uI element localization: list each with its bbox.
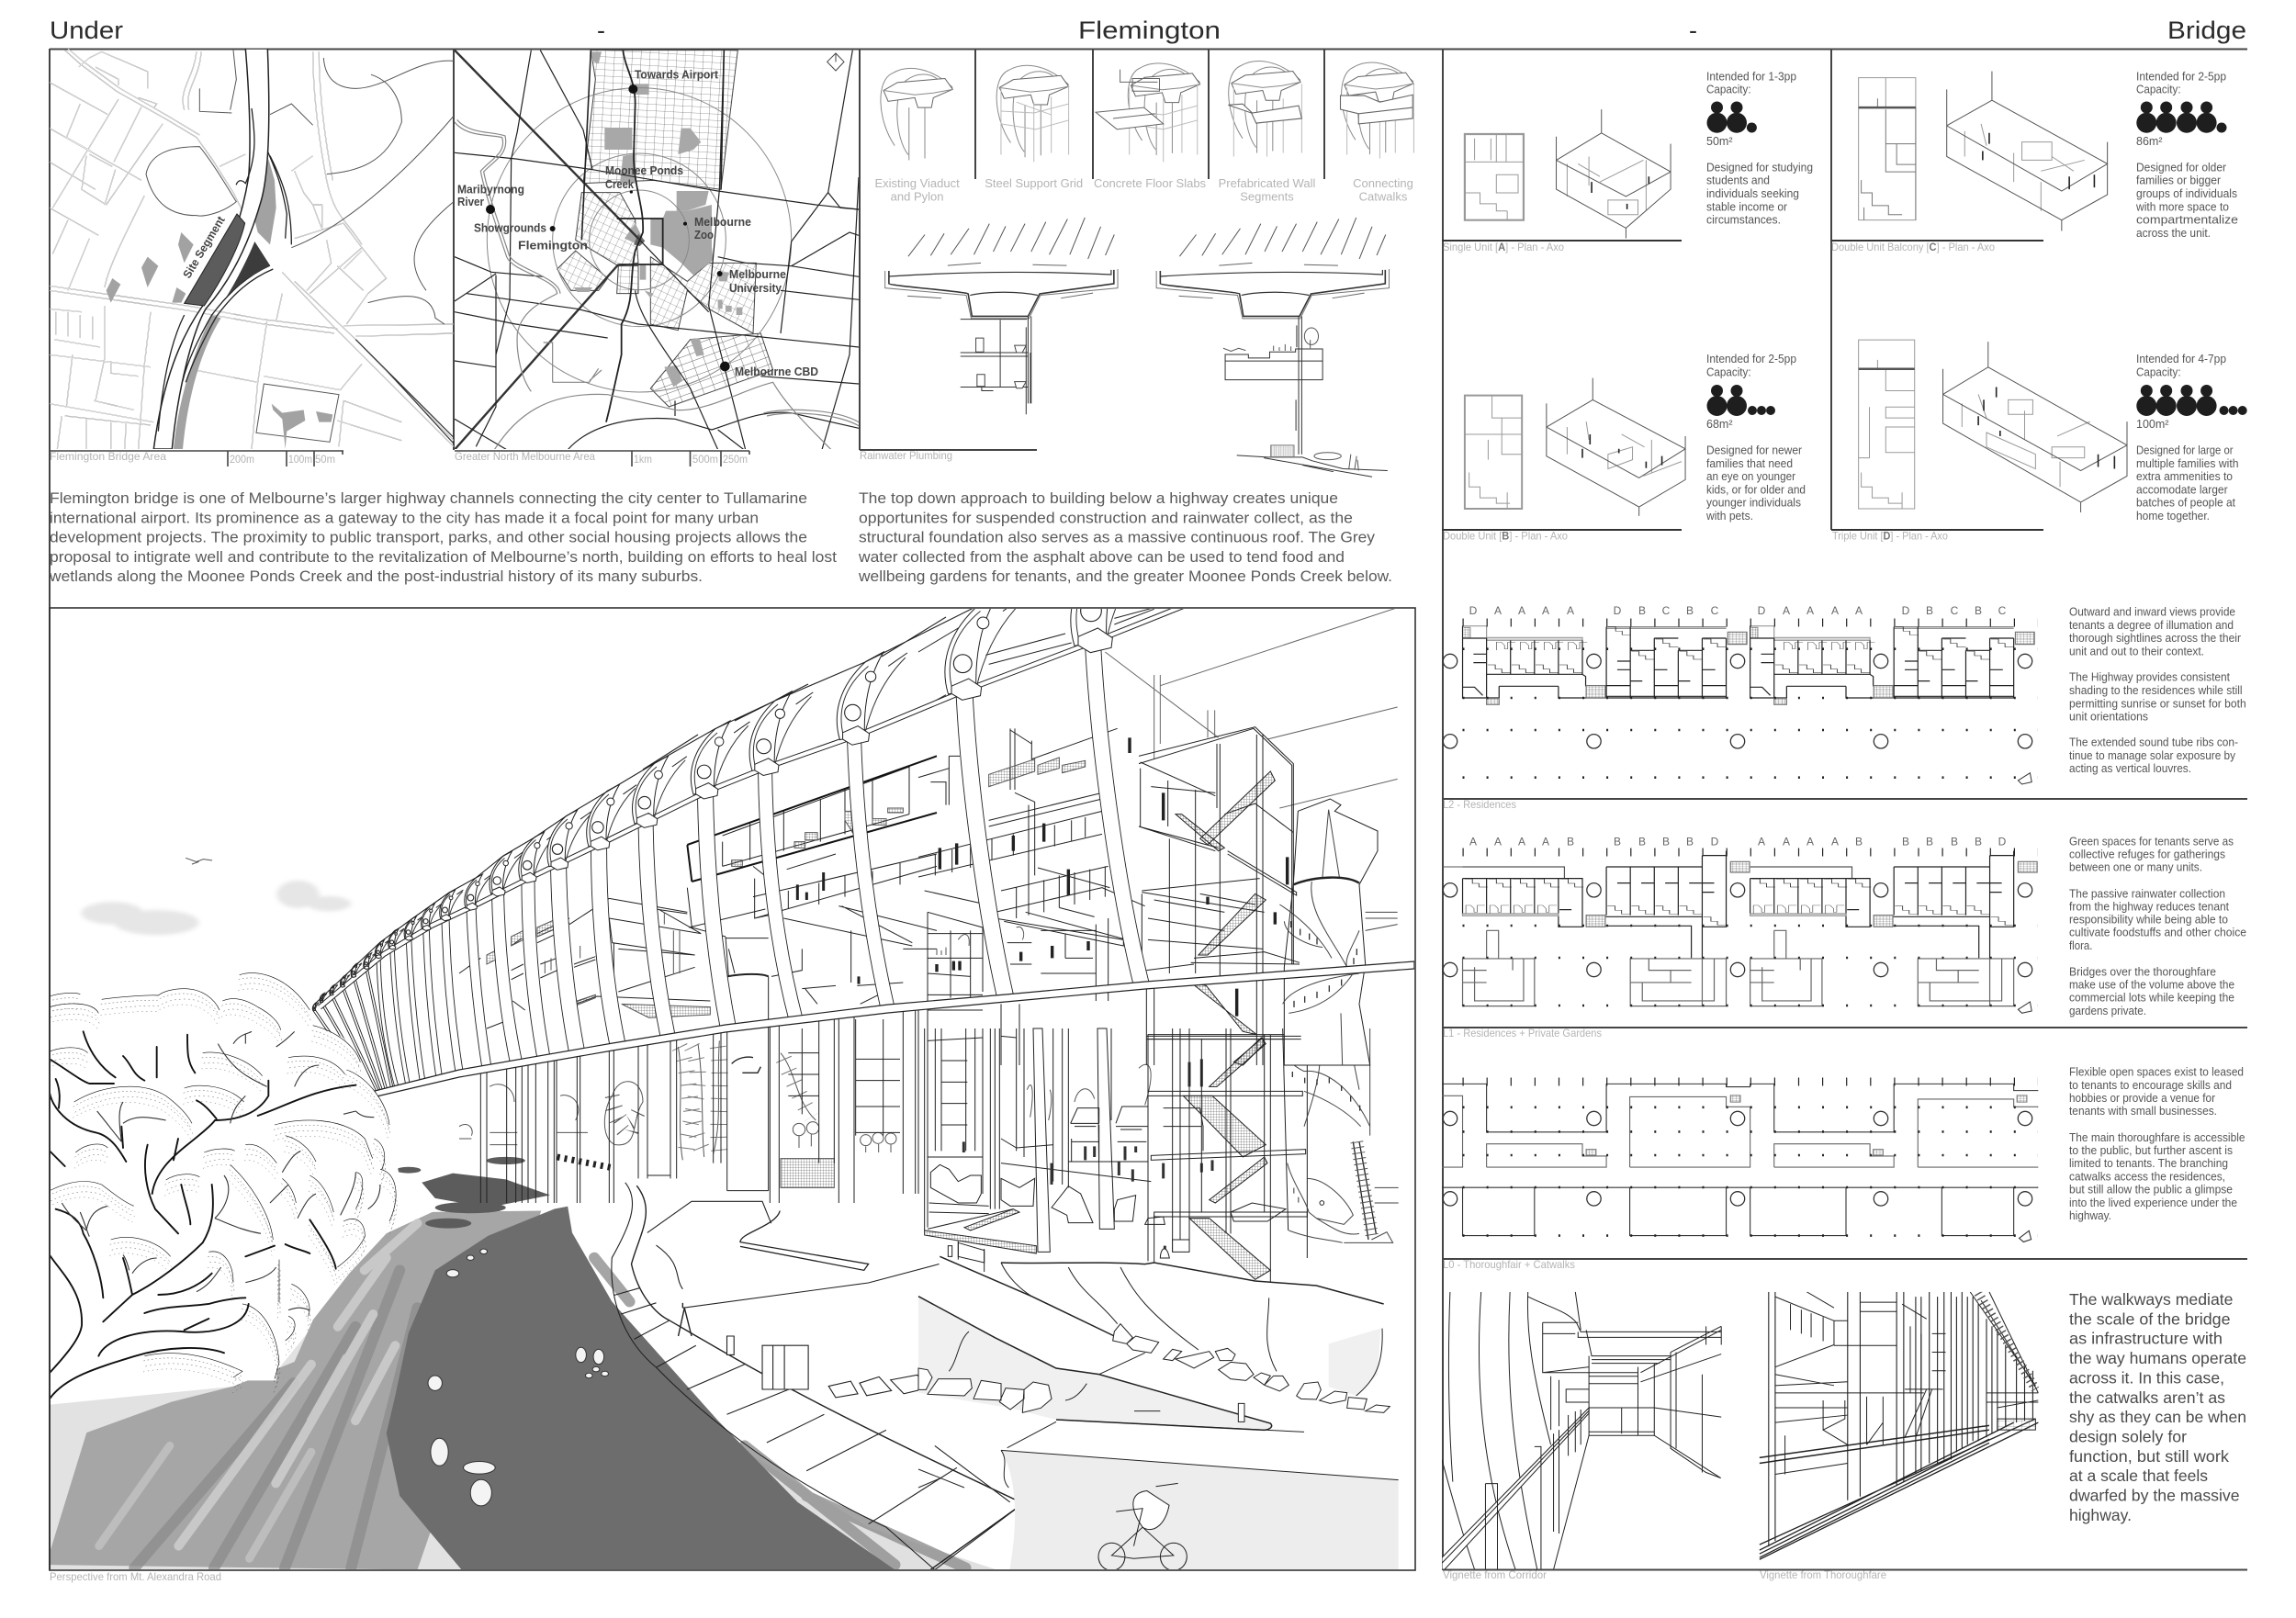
map 2 caption and scale: 1km xyxy=(634,453,652,466)
perspective frame xyxy=(50,608,1415,1570)
text block: walkways: highway. xyxy=(2069,1506,2132,1524)
panel: L0 thoroughfare and catwalks plan xyxy=(1442,1065,2247,1271)
unit C specification: Designed for older xyxy=(2136,161,2226,174)
unit B specification: 68m² xyxy=(1706,418,1732,431)
wetland pools xyxy=(396,1157,550,1229)
L1 description: collective refuges for gatherings xyxy=(2069,848,2225,861)
L1 column grid xyxy=(1462,852,2038,1006)
unit B specification: families that need xyxy=(1706,457,1793,470)
text block: top down approach: The top down approach to building below a highway creates unique xyxy=(859,490,1338,507)
text block: site description: international airport. Its prominence as a gateway to the city has made it a focal point for many urban xyxy=(50,510,759,526)
unit C specification: families or bigger xyxy=(2136,174,2221,187)
panel: greater north Melbourne map xyxy=(455,51,859,466)
map 2 caption and scale: 500m xyxy=(692,453,718,466)
unit C specification: with more space to xyxy=(2135,200,2229,213)
unit D specification: home together. xyxy=(2136,510,2210,522)
unit D specification: extra ammenities to xyxy=(2136,470,2233,483)
L2 unit letters: C xyxy=(1998,604,2007,617)
map 2 caption and scale: Greater North Melbourne Area xyxy=(455,450,595,463)
unit C specification xyxy=(2135,70,2238,240)
text block: walkways: at a scale that feels xyxy=(2069,1466,2208,1485)
lower rooms xyxy=(928,912,1109,1065)
L1 unit letters: A xyxy=(1806,836,1814,848)
L2 unit letters: C xyxy=(1662,604,1671,617)
L2 description: acting as vertical louvres. xyxy=(2069,762,2191,775)
map 2 labels: River xyxy=(457,196,484,208)
market stalls xyxy=(1068,1107,1203,1163)
title bar: - xyxy=(597,17,605,44)
brush strokes beside creek xyxy=(99,1223,966,1567)
unit A specification: students and xyxy=(1706,174,1770,187)
boardwalk xyxy=(925,1209,1036,1253)
stair tower lower xyxy=(1148,1035,1307,1217)
creek water xyxy=(387,1207,895,1570)
step: steel support grid xyxy=(996,65,1069,162)
L2 plan linework xyxy=(1463,626,2034,784)
step captions xyxy=(874,176,1413,204)
tower frame xyxy=(1139,727,1301,1065)
riverside path and banks xyxy=(612,1183,1023,1570)
roof beam linking ribs xyxy=(320,585,1236,1007)
ribs dark outlines xyxy=(314,514,1286,1095)
rock tower xyxy=(1284,799,1378,1065)
unit A specification: individuals seeking xyxy=(1706,187,1799,200)
unit C specification: across the unit. xyxy=(2136,227,2211,240)
L1 description: gardens private. xyxy=(2069,1005,2146,1017)
L1 unit letters: B xyxy=(1951,836,1958,848)
L2 unit letters: D xyxy=(1614,604,1622,617)
unit D specification: 100m² xyxy=(2136,418,2168,431)
L1 description: from the highway reduces tenant xyxy=(2069,900,2230,913)
map 1 gray buildings xyxy=(107,159,332,449)
L0 description xyxy=(2069,1065,2245,1222)
title bar: Flemington xyxy=(1078,17,1221,44)
L2 description: unit and out to their context. xyxy=(2069,645,2204,657)
unit D specification: Designed for large or xyxy=(2136,444,2234,457)
L2 unit letters: D xyxy=(1902,604,1910,617)
step captions: and Pylon xyxy=(891,190,944,204)
birds on the water xyxy=(428,1249,608,1506)
L1 unit letters: D xyxy=(1998,836,2007,848)
step: prefabricated wall segments xyxy=(1228,62,1301,156)
map 2 labels: Moonee Ponds xyxy=(605,164,683,177)
clouds and distant birds xyxy=(82,858,351,935)
L1 unit letters: A xyxy=(1831,836,1839,848)
title bar: Under xyxy=(50,17,123,44)
map 2 gray parks xyxy=(574,51,742,387)
L1 unit letters: B xyxy=(1662,836,1670,848)
vignette from corridor xyxy=(1442,1292,1721,1569)
L2 unit letters: A xyxy=(1494,604,1502,617)
text block: walkways: the way humans operate xyxy=(2069,1349,2246,1367)
text block: walkways xyxy=(2069,1290,2246,1524)
unit C specification: 86m² xyxy=(2136,135,2162,148)
text block: site description: wetlands along the Moonee Ponds Creek and the post-industrial history of its many suburbs. xyxy=(49,568,703,585)
L1 unit letters: A xyxy=(1758,836,1765,848)
L2 unit letters: B xyxy=(1686,604,1694,617)
rainwater section: gardens and creek xyxy=(1156,218,1390,477)
L2 unit letters: A xyxy=(1567,604,1574,617)
map 2 labels: Maribyrnong xyxy=(457,184,524,197)
fine twigs xyxy=(62,1031,380,1310)
L2 description: thorough sightlines across the their xyxy=(2069,632,2241,645)
L1 unit letters: B xyxy=(1855,836,1863,848)
unit C drawings xyxy=(1859,72,2108,231)
L2 column grid xyxy=(1462,623,2038,778)
vignette captions: Vignette from Corridor xyxy=(1443,1568,1547,1581)
L2 unit letters: A xyxy=(1542,604,1549,617)
unit B specification: Designed for newer xyxy=(1706,444,1802,457)
step captions: Concrete Floor Slabs xyxy=(1094,176,1207,190)
L0 description: hobbies or provide a venue for xyxy=(2069,1092,2215,1105)
L2 description: Outward and inward views provide xyxy=(2069,606,2235,619)
step: existing viaduct and pylon xyxy=(881,68,952,160)
lower deck columns and interior (traced group) xyxy=(459,756,937,1203)
residence box xyxy=(687,756,937,882)
people at stalls xyxy=(963,1059,1212,1256)
L2 unit letters: A xyxy=(1855,604,1863,617)
L2 unit letters: C xyxy=(1711,604,1719,617)
text block: walkways: as infrastructure with xyxy=(2069,1330,2223,1348)
step captions: Segments xyxy=(1240,190,1294,204)
L1 unit letters: A xyxy=(1494,836,1502,848)
step captions: Connecting xyxy=(1353,176,1413,190)
upper right residences and stair tower (traced group) xyxy=(918,608,1398,1065)
text block: walkways: the scale of the bridge xyxy=(2069,1309,2230,1328)
vignette from thoroughfare xyxy=(1760,1292,2038,1559)
tree canopy mass and foliage (traced group) xyxy=(49,973,401,1399)
L2 description xyxy=(2069,606,2246,775)
L1 unit letters: B xyxy=(1975,836,1982,848)
L2 description: shading to the residences while still xyxy=(2069,684,2243,697)
unit D specification: Capacity: xyxy=(2136,365,2181,378)
L2 unit letters: C xyxy=(1951,604,1959,617)
L1 description: flora. xyxy=(2069,939,2092,952)
L1 unit letters: A xyxy=(1469,836,1477,848)
unit D specification: batches of people at xyxy=(2136,497,2235,510)
L1 description xyxy=(2069,835,2246,1017)
map 1 caption and scale: 100m xyxy=(288,453,312,466)
step captions: Prefabricated Wall xyxy=(1219,176,1315,190)
caption: rainwater plumbing: Rainwater Plumbing xyxy=(860,449,952,462)
title bar: - xyxy=(1689,17,1697,44)
L2 unit letters: D xyxy=(1469,604,1478,617)
L0 description: to the public, but further ascent is xyxy=(2069,1144,2233,1157)
L2 description: unit orientations xyxy=(2069,710,2148,723)
map 1 streets xyxy=(50,49,454,449)
stones xyxy=(918,1324,1390,1412)
background foliage xyxy=(459,1040,896,1160)
unit B specification: kids, or for older and xyxy=(1706,483,1806,496)
step dividers xyxy=(860,49,1324,450)
unit captions: Single Unit [A] - Plan - Axo xyxy=(1443,241,1564,253)
map 1 caption and scale: 50m xyxy=(315,453,335,466)
unit D specification: Intended for 4-7pp xyxy=(2136,353,2226,365)
panel: vignettes xyxy=(1442,1290,2247,1581)
unit C specification: Capacity: xyxy=(2136,84,2181,96)
unit C specification: compartmentalize xyxy=(2136,214,2238,227)
step captions: Catwalks xyxy=(1359,190,1408,204)
text block: top down approach: wellbeing gardens for tenants, and the greater Moonee Ponds Creek below. xyxy=(858,568,1392,585)
rainwater section: residences xyxy=(885,218,1118,414)
step captions: Steel Support Grid xyxy=(985,176,1083,190)
canopy ticks xyxy=(49,978,397,1395)
text block: walkways: dwarfed by the massive xyxy=(2069,1487,2240,1505)
map 1 caption and scale: Flemington Bridge Area xyxy=(50,450,166,463)
L1 description: Bridges over the thoroughfare xyxy=(2069,965,2216,978)
unit C specification: Intended for 2-5pp xyxy=(2136,70,2226,83)
unit B specification: Capacity: xyxy=(1706,365,1751,378)
residence units xyxy=(723,767,937,918)
L1 unit letters: B xyxy=(1638,836,1646,848)
unit A specification: Capacity: xyxy=(1706,84,1751,96)
L1 description: The passive rainwater collection xyxy=(2069,887,2225,900)
unit D specification xyxy=(2136,353,2247,522)
unit B specification: with pets. xyxy=(1705,510,1753,522)
rocks under bridge xyxy=(930,1164,1286,1224)
canopy outlines xyxy=(50,973,396,1379)
map 2 caption and scale xyxy=(455,450,749,466)
panel: L1 residences and gardens plan xyxy=(1442,835,2247,1039)
map 2 labels: Melbourne xyxy=(694,216,751,229)
unit captions xyxy=(1443,241,1995,543)
unit B specification: younger individuals xyxy=(1706,497,1801,510)
text block: top down approach xyxy=(858,490,1392,585)
L1 circular pylons xyxy=(1443,883,2032,977)
L1 rule and caption: L1 - Residences + Private Gardens xyxy=(1443,1027,1602,1039)
map 1 caption and scale xyxy=(50,450,343,466)
L0 description: Flexible open spaces exist to leased xyxy=(2069,1065,2244,1078)
step: connecting catwalks xyxy=(1340,62,1413,158)
unit captions: Double Unit Balcony [C] - Plan - Axo xyxy=(1831,241,1995,253)
arch heads over ribs xyxy=(312,533,1162,1011)
L1 unit letters: A xyxy=(1518,836,1525,848)
text block: top down approach: opportunites for suspended construction and rainwater collect, as the xyxy=(859,510,1353,526)
L2 unit letters: A xyxy=(1783,604,1790,617)
catwalk platform xyxy=(995,866,1145,946)
map 2 radius circles xyxy=(487,88,792,392)
branches xyxy=(50,1031,355,1399)
vignette captions xyxy=(1443,1568,1886,1581)
L0 description: into the lived experience under the xyxy=(2069,1197,2237,1209)
L2 description: permitting sunrise or sunset for both xyxy=(2069,697,2246,710)
columns xyxy=(480,1008,928,1203)
L0 circular pylons xyxy=(1443,1111,2032,1206)
L0 description: The main thoroughfare is accessible xyxy=(2069,1131,2245,1144)
L2 description: The extended sound tube ribs con- xyxy=(2069,736,2238,749)
text block: walkways: across it. In this case, xyxy=(2069,1368,2224,1387)
L1 unit letters: A xyxy=(1542,836,1549,848)
L1 description: cultivate foodstuffs and other choice xyxy=(2069,927,2246,939)
L2 unit letters: B xyxy=(1926,604,1933,617)
unit A specification xyxy=(1706,70,1813,227)
L1 description: responsibility while being able to xyxy=(2069,914,2228,927)
L1 plan linework xyxy=(1442,851,2037,1013)
title bar xyxy=(50,17,2246,44)
unit A specification: Designed for studying xyxy=(1706,161,1813,174)
top envelope of the roof arches xyxy=(315,606,977,1004)
map 2 labels: Towards Airport xyxy=(635,68,719,81)
funnels under residence xyxy=(687,888,937,1019)
unit A specification: 50m² xyxy=(1706,135,1732,148)
unit captions: Double Unit [B] - Plan - Axo xyxy=(1443,530,1568,543)
L0 column grid xyxy=(1462,1082,2038,1236)
text block: walkways: function, but still work xyxy=(2069,1447,2229,1466)
vignette captions: Vignette from Thoroughfare xyxy=(1760,1568,1886,1581)
perspective drawing xyxy=(49,607,1416,1583)
L1 description: make use of the volume above the xyxy=(2069,979,2234,992)
L1 unit letters: A xyxy=(1783,836,1790,848)
map 2 rivers xyxy=(455,119,859,450)
L1 unit letters: B xyxy=(1567,836,1574,848)
highway xyxy=(153,49,269,449)
map 2 labels: Flemington xyxy=(518,239,588,252)
text block: top down approach: water collected from the asphalt above can be used to tend food and xyxy=(858,549,1345,566)
text block: walkways: The walkways mediate xyxy=(2069,1290,2234,1309)
step: concrete floor slabs xyxy=(1096,63,1200,162)
columns xyxy=(925,1028,1111,1230)
vignette rule xyxy=(1443,1568,2247,1570)
L2 description: The Highway provides consistent xyxy=(2069,671,2230,684)
map 2 location dots xyxy=(486,84,730,371)
unit D specification: accomodate larger xyxy=(2136,483,2228,496)
text block: site description xyxy=(49,490,837,585)
text block: walkways: the catwalks aren’t as xyxy=(2069,1388,2225,1407)
left residence volumes xyxy=(459,898,710,1028)
L0 description: catwalks access the residences, xyxy=(2069,1171,2225,1184)
unit D drawings xyxy=(1859,340,2127,512)
L0 description: tenants with small businesses. xyxy=(2069,1105,2217,1118)
L1 unit letters: B xyxy=(1614,836,1621,848)
L2 unit letters: D xyxy=(1758,604,1766,617)
site segment xyxy=(185,214,245,306)
L2 rule and caption: L2 - Residences xyxy=(1443,798,1516,811)
title bar: Bridge xyxy=(2167,17,2246,44)
L0 rule and caption: L0 - Thoroughfair + Catwalks xyxy=(1443,1258,1575,1271)
L2 unit letters: A xyxy=(1831,604,1839,617)
unit A specification: Intended for 1-3pp xyxy=(1706,70,1796,83)
map 2 labels: Creek xyxy=(605,178,634,191)
L1 unit letters: B xyxy=(1686,836,1694,848)
L0 description: but still allow the public a glimpse xyxy=(2069,1184,2233,1197)
L2 unit letters: A xyxy=(1806,604,1814,617)
ground washes xyxy=(46,1211,996,1570)
unit A drawings xyxy=(1465,109,1671,238)
bank lines xyxy=(918,1256,1384,1430)
platypus sculpture xyxy=(1284,1028,1399,1242)
L1 unit letters: B xyxy=(1926,836,1933,848)
L1 description: between one or many units. xyxy=(2069,861,2202,874)
right bank, rocks, platypus and lower stair (traced group) xyxy=(918,1028,1399,1610)
step captions: Existing Viaduct xyxy=(874,176,960,190)
L1 description: commercial lots while keeping the xyxy=(2069,992,2234,1005)
map 2 labels: Melbourne xyxy=(729,268,786,281)
L0 description: limited to tenants. The branching xyxy=(2069,1157,2228,1170)
unit A specification: stable income or xyxy=(1706,200,1787,213)
L0 description: highway. xyxy=(2069,1209,2111,1222)
map 2 labels: Showgrounds xyxy=(474,222,546,235)
caption: perspective: Perspective from Mt. Alexandra Road xyxy=(50,1570,221,1583)
map 2 labels: University xyxy=(729,282,782,295)
unit C specification: groups of individuals xyxy=(2136,187,2237,200)
units and rails xyxy=(918,728,1118,927)
map 2 caption and scale: 250m xyxy=(723,453,748,466)
L2 unit letters: A xyxy=(1518,604,1525,617)
unit B specification xyxy=(1705,353,1806,522)
ribs white fill xyxy=(314,643,1142,1095)
text block: walkways: shy as they can be when xyxy=(2069,1408,2246,1426)
bird shapes xyxy=(732,1057,760,1073)
text block: site description: Flemington bridge is one of Melbourne’s larger highway channels connecting the city center to Tullamarine xyxy=(50,490,807,507)
L1 description: Green spaces for tenants serve as xyxy=(2069,835,2234,848)
L2 description: tenants a degree of illumation and xyxy=(2069,619,2234,632)
panel: construction sequence and rainwater plumbing xyxy=(860,49,1413,477)
unit B specification: Intended for 2-5pp xyxy=(1706,353,1796,365)
cyclist and lower bank xyxy=(1098,1483,1187,1570)
L2 circular pylons xyxy=(1443,654,2032,748)
map 2 labels xyxy=(457,68,818,378)
text block: walkways: design solely for xyxy=(2069,1427,2187,1445)
map 1 caption and scale: 200m xyxy=(230,453,254,466)
wall segments hanging from roof xyxy=(918,608,1154,710)
unit captions: Triple Unit [D] - Plan - Axo xyxy=(1832,530,1948,543)
panel: unit types xyxy=(1442,70,2247,543)
unit underlines xyxy=(1442,241,2043,530)
L2 unit letters: B xyxy=(1975,604,1982,617)
unit B specification: an eye on younger xyxy=(1706,470,1795,483)
text block: top down approach: structural foundation also serves as a massive continuous roof. The Grey xyxy=(859,529,1376,545)
bank washes xyxy=(918,1297,1398,1569)
text block: site description: development projects. The proximity to public transport, parks, and other social housing projects allows the xyxy=(50,529,807,545)
L2 description: tinue to manage solar exposure by xyxy=(2069,749,2236,762)
unit D specification: multiple families with xyxy=(2136,457,2239,470)
map 2 labels: Melbourne CBD xyxy=(735,365,818,378)
L1 unit letters: D xyxy=(1711,836,1719,848)
site segment label: Site Segment xyxy=(181,214,228,281)
bollards and sign xyxy=(948,1242,1244,1421)
white tree mass xyxy=(50,989,401,1399)
map 2 labels: Zoo xyxy=(694,229,714,242)
unit B drawings xyxy=(1465,378,1685,516)
L1 unit letters xyxy=(1469,836,2007,848)
text block: site description: proposal to intigrate well and contribute to the revitalization of Melbourne’s north, building on efforts to heal lost xyxy=(50,549,837,566)
panel: Flemington bridge area map xyxy=(50,49,454,466)
guide wires xyxy=(1105,608,1398,808)
deck band xyxy=(375,961,1414,1096)
panel: L2 residences plan xyxy=(1443,604,2247,811)
L2 unit letters xyxy=(1469,604,2007,617)
map 2 street grids xyxy=(557,51,773,407)
unit A specification: circumstances. xyxy=(1706,214,1781,227)
L0 description: to tenants to encourage skills and xyxy=(2069,1079,2232,1092)
L0 plan linework xyxy=(1442,1084,2038,1242)
north arrow xyxy=(827,53,844,71)
L2 unit letters: B xyxy=(1638,604,1646,617)
L1 unit letters: B xyxy=(1902,836,1909,848)
map 2 roads xyxy=(455,51,859,450)
